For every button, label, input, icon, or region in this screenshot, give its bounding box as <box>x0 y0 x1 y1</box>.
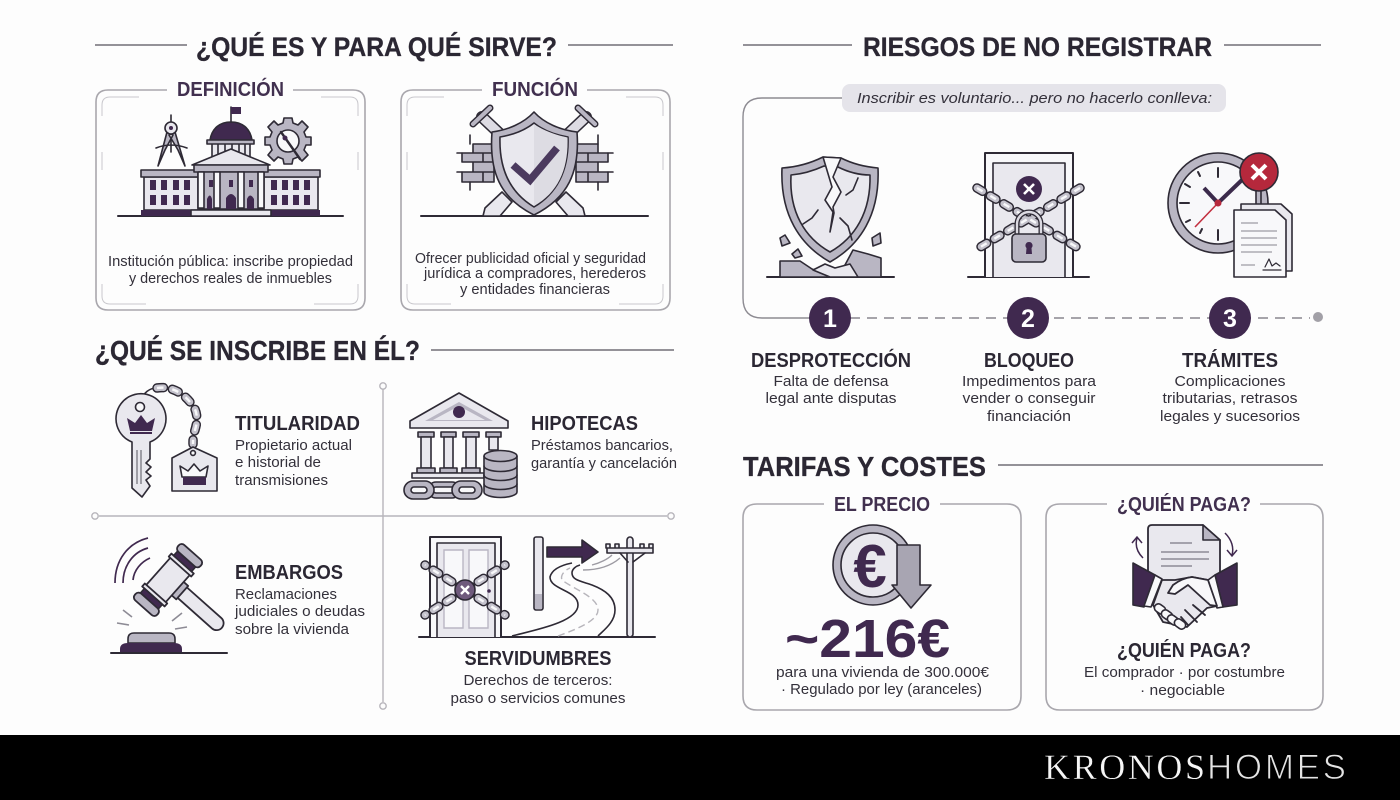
text: trámites: Complicaciones <box>1174 374 1286 390</box>
item: servidumbres <box>419 537 655 707</box>
text: quién paga: El comprador · por costumbre <box>1084 665 1285 681</box>
step 2 marker <box>1007 297 1049 339</box>
heading: qué es y para qué sirve: ¿QUÉ ES Y PARA QUÉ SIRVE? <box>196 31 557 62</box>
text: definición: Institución pública: inscribe propiedad <box>108 254 353 270</box>
callout: inscribir es voluntario: Inscribir es voluntario... pero no hacerlo conlleva: <box>857 90 1212 107</box>
text: titularidad: Propietario actual <box>235 438 352 454</box>
step 1 marker: 1 <box>823 305 837 333</box>
text: trámites: tributarias, retrasos <box>1162 391 1298 407</box>
logo: kronos homes: HOMES <box>1207 748 1346 787</box>
icon: government building with compass and gear <box>118 107 343 216</box>
text: precio note <box>776 665 989 698</box>
text: embargos <box>234 562 365 638</box>
icon: clock with alert and document <box>1168 153 1292 277</box>
heading: el precio: EL PRECIO <box>834 494 930 516</box>
text: desprotección <box>751 348 911 407</box>
text: embargos: judiciales o deudas <box>234 604 365 620</box>
text: titularidad: TITULARIDAD <box>235 413 360 435</box>
text: función: Ofrecer publicidad oficial y seguridad <box>415 251 646 267</box>
text: hipotecas: Préstamos bancarios, <box>531 438 673 454</box>
panel: quién paga <box>1046 493 1323 710</box>
text: servidumbres: Derechos de terceros: <box>464 673 612 689</box>
panel: definición <box>96 77 365 310</box>
panel: función <box>401 77 670 310</box>
text: hipotecas: HIPOTECAS <box>531 413 638 435</box>
text: hipotecas <box>531 413 677 472</box>
text: precio note: · Regulado por ley (aranceles) <box>781 682 982 698</box>
text: definición <box>108 254 353 287</box>
icon: contract and handshake <box>1132 525 1237 631</box>
icon: chained door, road, arrow and utility pole <box>419 537 655 637</box>
text: definición: y derechos reales de inmuebles <box>129 271 332 287</box>
text: titularidad <box>235 413 360 489</box>
text: trámites: legales y sucesorios <box>1160 409 1300 425</box>
text: hipotecas: garantía y cancelación <box>531 456 677 472</box>
text: bloqueo: Impedimentos para <box>962 374 1097 390</box>
step 3 marker: 3 <box>1223 305 1237 333</box>
heading: riesgos de no registrar: RIESGOS DE NO REGISTRAR <box>863 32 1212 62</box>
text: desprotección: legal ante disputas <box>766 391 896 407</box>
heading: tarifas y costes: TARIFAS Y COSTES <box>743 451 986 482</box>
figure: about 216 euros: ~216€ <box>785 609 950 669</box>
quadrant dividers <box>92 383 674 709</box>
text: función: y entidades financieras <box>460 282 610 298</box>
footer bar with logo <box>0 735 1400 800</box>
text: bloqueo: vender o conseguir <box>962 391 1096 407</box>
text: quién paga: ¿QUIÉN PAGA? <box>1117 639 1251 662</box>
logo: kronos homes <box>1044 747 1346 787</box>
text: quién paga <box>1084 639 1285 699</box>
text: trámites: TRÁMITES <box>1182 349 1278 372</box>
icon: bank with chain and coins <box>404 393 517 499</box>
heading: definición: DEFINICIÓN <box>177 77 284 101</box>
text: bloqueo: financiación <box>987 409 1071 425</box>
icon: key with chain and tag <box>116 388 217 497</box>
icon: euro coin with down arrow <box>833 525 931 608</box>
item: titularidad <box>116 388 360 497</box>
logo: kronos homes: KRONOS <box>1044 747 1205 787</box>
heading: quién paga top: ¿QUIÉN PAGA? <box>1117 493 1251 516</box>
text: titularidad: e historial de <box>235 455 321 471</box>
icon: euro coin with down arrow: € <box>853 533 887 600</box>
text: embargos: Reclamaciones <box>235 587 337 603</box>
item: embargos <box>111 538 365 655</box>
item: hipotecas <box>404 393 677 499</box>
text: titularidad: transmisiones <box>235 473 328 489</box>
heading: qué se inscribe en él: ¿QUÉ SE INSCRIBE EN ÉL? <box>95 335 420 366</box>
icon: broken shield <box>767 157 894 277</box>
text: función <box>415 251 646 298</box>
text: bloqueo <box>962 350 1097 425</box>
step 3 marker <box>1209 297 1251 339</box>
text: quién paga: · negociable <box>1140 683 1225 699</box>
step 2 marker: 2 <box>1021 305 1035 333</box>
text: embargos: EMBARGOS <box>235 562 343 584</box>
text: servidumbres: SERVIDUMBRES <box>464 648 612 670</box>
text: servidumbres: paso o servicios comunes <box>450 691 626 707</box>
text: servidumbres <box>450 648 626 707</box>
text: trámites <box>1160 349 1300 425</box>
text: precio note: para una vivienda de 300.000€ <box>776 665 989 681</box>
icon: shield with check, swords and wall <box>421 108 648 216</box>
panel: el precio <box>743 494 1021 710</box>
callout: inscribir es voluntario <box>842 84 1226 112</box>
text: función: jurídica a compradores, herederos <box>423 266 646 282</box>
panel: riesgos timeline <box>743 84 1323 425</box>
heading: función: FUNCIÓN <box>492 77 578 101</box>
text: embargos: sobre la vivienda <box>235 622 350 638</box>
icon: chained door with padlock <box>968 153 1089 277</box>
text: bloqueo: BLOQUEO <box>984 350 1074 372</box>
icon: gavel <box>111 538 246 655</box>
text: desprotección: DESPROTECCIÓN <box>751 348 911 372</box>
text: desprotección: Falta de defensa <box>774 374 889 390</box>
step 1 marker <box>809 297 851 339</box>
